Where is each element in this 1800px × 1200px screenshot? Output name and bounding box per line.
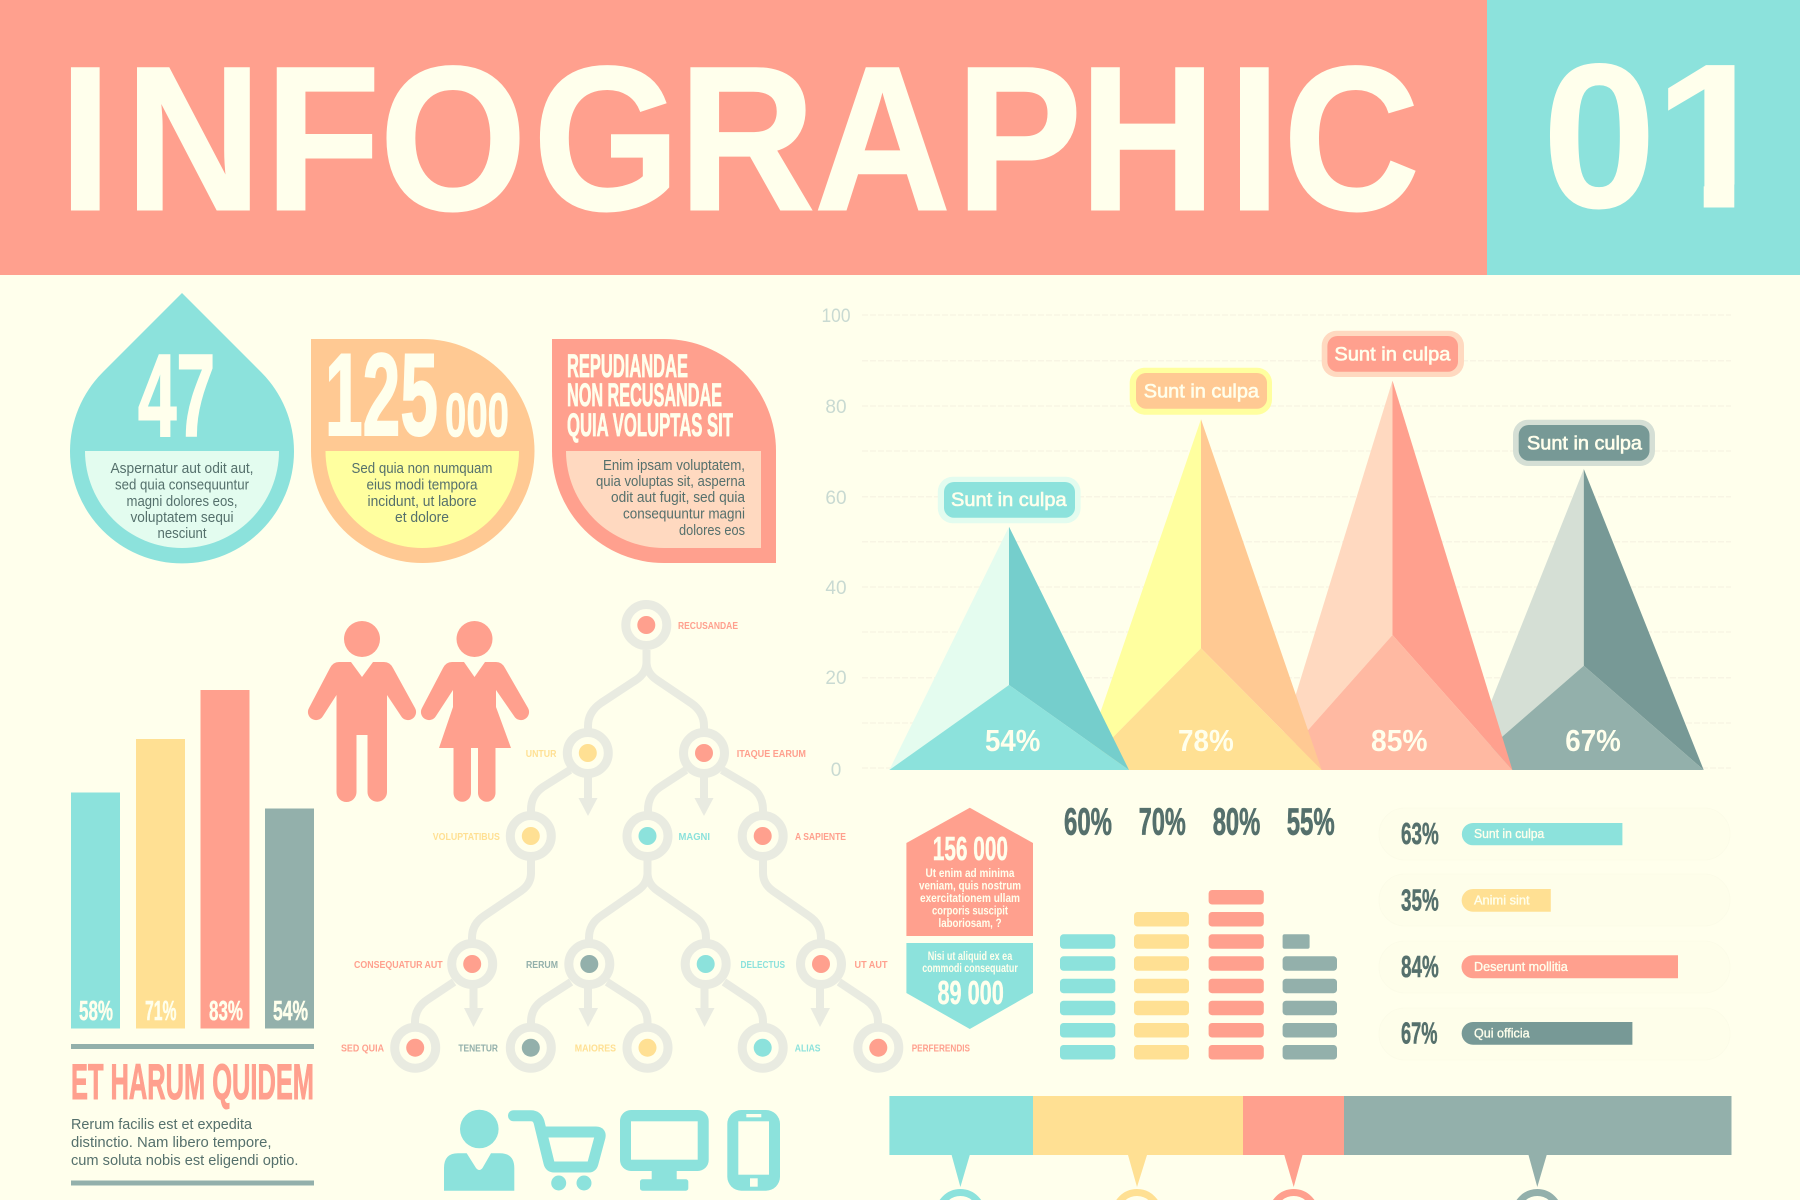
text block: et harum quidem: ET HARUM QUIDEM: [71, 1054, 314, 1110]
row: 67%: 67%: [1401, 1016, 1438, 1050]
row: 84%: Deserunt mollitia: [1474, 959, 1569, 974]
callout: gray pyramid: Sunt in culpa: [1527, 433, 1642, 454]
segment: yellow: [1033, 1096, 1243, 1200]
chart axis labels: 20: [825, 668, 847, 689]
header band: [0, 0, 1487, 275]
chart axis labels: [822, 306, 850, 781]
chart axis labels: 60: [825, 488, 847, 509]
node: a sapiente: A SAPIENTE: [795, 831, 846, 843]
panel: salmon leaf text block: QUIA VOLUPTAS SIT: [567, 407, 733, 443]
callout: salmon pyramid: [1322, 331, 1464, 377]
row: 63%: Sunt in culpa: [1474, 826, 1545, 841]
segment: salmon: [1243, 1096, 1344, 1200]
chart axis labels: 40: [825, 578, 847, 599]
callout: teal pyramid: [938, 477, 1081, 523]
node: voluptatibus: VOLUPTATIBUS: [433, 831, 500, 843]
panel: teal hexagon stat: [906, 943, 1033, 1029]
panel: salmon hexagon stat: corporis suscipit: [932, 906, 1008, 918]
node: untur: [526, 732, 608, 774]
panel: salmon leaf text block: [552, 339, 776, 563]
panel: salmon leaf text block: NON RECUSANDAE: [567, 377, 722, 413]
bar chart: left percentages: 54%: [273, 995, 308, 1026]
pyramid: 78%: [1081, 419, 1322, 770]
header number panel: 1: [1653, 20, 1775, 252]
panel: salmon hexagon stat: laboriosam, ?: [938, 918, 1002, 930]
callout: orange pyramid: Sunt in culpa: [1144, 382, 1259, 403]
segment: gray: [1344, 1096, 1732, 1200]
node: rerum: [526, 944, 610, 984]
callout: teal pyramid: Sunt in culpa: [951, 490, 1067, 511]
panel: salmon hexagon stat: [906, 808, 1033, 936]
node: a sapiente: [742, 816, 846, 856]
pyramid: 67%: [1464, 469, 1704, 770]
panel: orange drop 125 000: Sed quia non numquam: [352, 461, 492, 477]
text block: et harum quidem: Rerum facilis est et expedita: [71, 1116, 253, 1133]
horizontal bar list: [1379, 808, 1730, 1060]
text block: et harum quidem: [71, 1044, 314, 1186]
panel: teal drop 47: magni dolores eos,: [126, 494, 238, 510]
icon: woman: [421, 621, 529, 802]
panel: salmon hexagon stat: 156 000: [933, 830, 1008, 867]
node: tenetur: [458, 1027, 551, 1068]
title: INFOGRAPHIC: [59, 23, 1420, 253]
node: itaque earum: [684, 732, 806, 774]
icon: shopping cart: [514, 1116, 600, 1190]
node: recusandae: [626, 604, 738, 646]
node: untur: UNTUR: [526, 748, 557, 760]
node: itaque earum: ITAQUE EARUM: [737, 748, 806, 760]
node: sed quia: SED QUIA: [341, 1043, 384, 1055]
node: recusandae: RECUSANDAE: [678, 620, 738, 632]
panel: orange drop 125 000: eius modi tempora: [366, 478, 478, 494]
callout: gray pyramid: [1513, 420, 1655, 466]
text block: et harum quidem: cum soluta nobis est eligendi optio.: [71, 1152, 298, 1169]
block chart percentages: 80%: [1213, 802, 1260, 844]
icon: user: [444, 1110, 514, 1191]
icon: man: [308, 621, 416, 802]
node: ut aut: [800, 944, 888, 984]
header number panel: 0: [1542, 20, 1657, 252]
text block: et harum quidem: distinctio. Nam libero tempore,: [71, 1134, 272, 1151]
panel: orange drop 125 000: 125: [325, 329, 438, 460]
node: delectus: [685, 944, 785, 984]
chart axis labels: 0: [831, 760, 841, 781]
node: maiores: MAIORES: [575, 1043, 616, 1055]
pyramid: 54%: [889, 527, 1129, 770]
panel: orange drop 125 000: et dolore: [395, 510, 449, 526]
block chart percentages: 70%: [1139, 802, 1186, 844]
node: tenetur: TENETUR: [458, 1043, 498, 1055]
pyramid: 85%: [1273, 381, 1512, 770]
stacked block chart: [1060, 802, 1337, 1060]
panel: salmon hexagon stat: veniam, quis nostrum: [919, 880, 1021, 892]
bar chart: left percentages: 58%: [79, 995, 113, 1026]
panel: salmon hexagon stat: exercitationem ullam: [920, 893, 1020, 905]
segment: teal: [889, 1096, 1033, 1200]
block chart percentages: [1064, 802, 1335, 844]
pyramid: 67%: 67%: [1565, 723, 1621, 758]
node: sed quia: [341, 1027, 436, 1068]
row: 67%: Qui officia: [1474, 1026, 1530, 1040]
icon: monitor: [620, 1110, 709, 1191]
block column 55%: [1283, 934, 1337, 1060]
panel: orange drop 125 000: incidunt, ut labore: [368, 494, 476, 510]
pyramid: 85%: 85%: [1371, 723, 1428, 758]
row: 63%: [1379, 808, 1730, 860]
tree diagram: [341, 604, 970, 1068]
row: 35%: 35%: [1401, 883, 1439, 918]
chart axis labels: 100: [822, 306, 850, 327]
node: magni: [627, 816, 710, 856]
node: ut aut: UT AUT: [854, 959, 888, 971]
panel: salmon leaf text block: consequuntur magni: [623, 506, 745, 522]
panel: teal hexagon stat: Nisi ut aliquid ex ea: [928, 951, 1013, 963]
panel: orange drop 125 000: 000: [445, 382, 509, 450]
panel: teal drop 47: [70, 293, 294, 563]
node: alias: [742, 1027, 820, 1068]
row: 63%: 63%: [1401, 816, 1439, 851]
bar chart: left percentages: 83%: [209, 995, 243, 1026]
node: magni: MAGNI: [678, 831, 710, 843]
panel: salmon hexagon stat: Ut enim ad minima: [926, 868, 1015, 880]
node: perferendis: [858, 1027, 970, 1068]
block chart percentages: 60%: [1064, 802, 1112, 844]
row: 35%: Animi sint: [1474, 892, 1530, 908]
node: delectus: DELECTUS: [740, 959, 785, 971]
panel: salmon leaf text block: dolores eos: [679, 523, 745, 539]
panel: teal drop 47: voluptatem sequi: [130, 510, 234, 526]
tree connectors and arrows: [415, 650, 878, 1030]
block column 60%: [1060, 934, 1115, 1060]
node: perferendis: PERFERENDIS: [912, 1043, 970, 1055]
panel: teal drop 47: Aspernatur aut odit aut,: [110, 461, 254, 477]
panel: salmon leaf text block: odit aut fugit, sed quia: [611, 490, 746, 506]
block chart percentages: 55%: [1287, 802, 1335, 844]
node: voluptatibus: [433, 816, 551, 856]
row: 67%: [1379, 1008, 1730, 1060]
segmented bar with pointers: [889, 1096, 1732, 1200]
pyramid: 54%: 54%: [985, 723, 1040, 758]
pyramid: 78%: 78%: [1178, 723, 1234, 758]
bar chart: left percentages: [71, 690, 314, 1028]
panel: teal hexagon stat: commodi consequatur: [922, 963, 1018, 975]
callout: orange pyramid: [1130, 368, 1272, 415]
bar chart: left percentages: 71%: [145, 995, 177, 1026]
panel: teal drop 47: 47: [138, 330, 215, 461]
node: rerum: RERUM: [526, 959, 558, 971]
node: consequatur aut: CONSEQUATUR AUT: [354, 959, 443, 971]
block column 80%: [1209, 890, 1264, 1060]
pyramid chart: [822, 306, 1731, 781]
panel: salmon leaf text block: REPUDIANDAE: [567, 348, 688, 384]
node: maiores: [575, 1027, 668, 1068]
panel: salmon leaf text block: quia voluptas sit, asperna: [596, 474, 746, 490]
header number panel: [1487, 0, 1800, 275]
block column 70%: [1134, 912, 1189, 1060]
node: alias: ALIAS: [795, 1043, 820, 1055]
panel: teal hexagon stat: 89 000: [938, 974, 1004, 1011]
node: consequatur aut: [354, 944, 493, 984]
panel: teal drop 47: sed quia consequuntur: [115, 478, 249, 494]
panel: orange drop 125 000: [311, 329, 534, 563]
panel: salmon leaf text block: Enim ipsam voluptatem,: [603, 458, 745, 474]
chart axis labels: 80: [825, 397, 847, 418]
panel: teal drop 47: nesciunt: [158, 526, 206, 542]
row: 35%: [1379, 874, 1730, 926]
icon: smartphone: [727, 1110, 780, 1191]
row: 84%: [1379, 941, 1730, 993]
callout: salmon pyramid: Sunt in culpa: [1334, 345, 1451, 366]
row: 84%: 84%: [1401, 949, 1439, 984]
